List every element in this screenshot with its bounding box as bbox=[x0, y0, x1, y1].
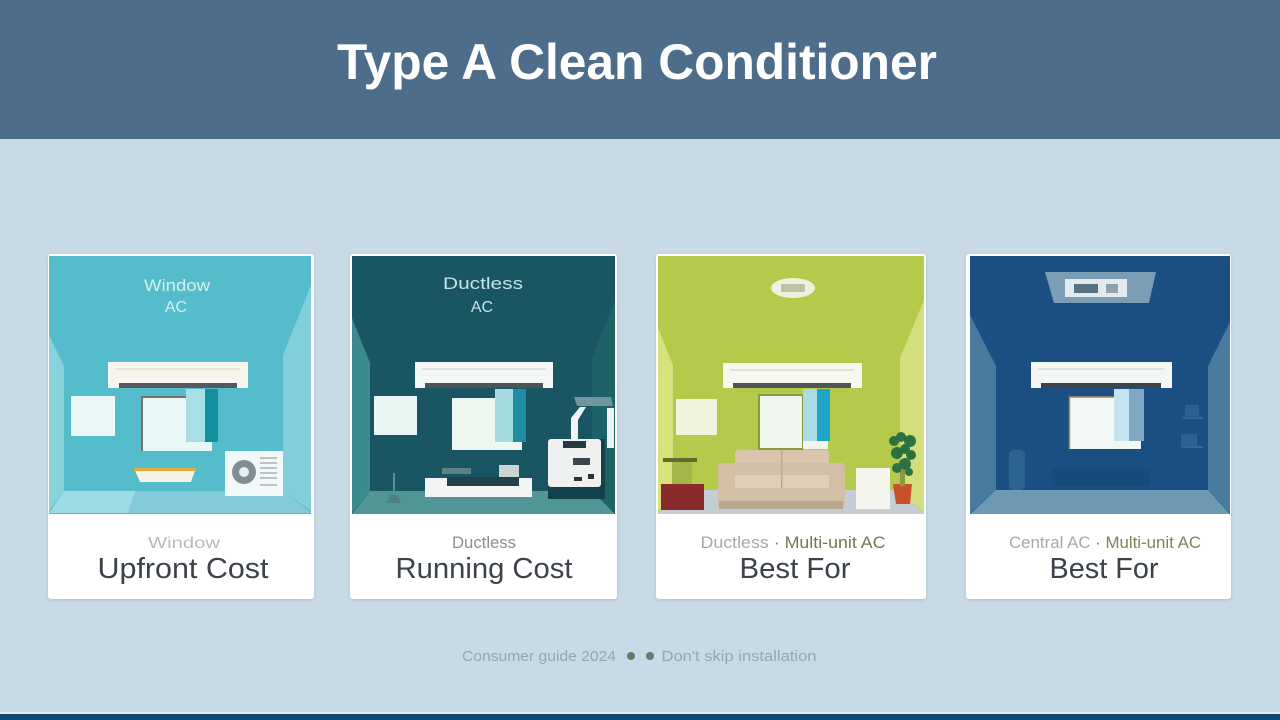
side table bbox=[661, 458, 704, 510]
panel: window AC upfront cost bbox=[48, 254, 314, 599]
room illustration: lime bbox=[658, 256, 924, 514]
room illustration: dark teal bbox=[352, 256, 615, 514]
card text: Upfront Cost bbox=[98, 553, 268, 585]
room label bbox=[443, 274, 523, 316]
card text bbox=[1009, 533, 1201, 585]
wall panel bbox=[676, 399, 717, 435]
window bbox=[141, 389, 218, 451]
AC unit bbox=[1031, 362, 1172, 388]
media console bbox=[386, 465, 532, 503]
card text: Window bbox=[148, 535, 221, 552]
card text: Central AC · Multi-unit AC bbox=[1009, 533, 1201, 552]
panel: central AC best for bbox=[966, 254, 1231, 599]
potted plant bbox=[889, 432, 916, 504]
portable unit bbox=[548, 397, 614, 499]
wall panel bbox=[374, 396, 417, 435]
room illustration: teal bbox=[49, 256, 311, 514]
cabinet bbox=[856, 468, 890, 509]
card text bbox=[700, 533, 886, 585]
ceiling vent bbox=[1045, 272, 1156, 303]
header band bbox=[0, 0, 1280, 139]
bottom bar bbox=[0, 712, 1280, 720]
AC unit bbox=[415, 362, 553, 388]
footer note: Don't skip installation bbox=[662, 648, 816, 665]
card text: Ductless · Multi-unit AC bbox=[700, 533, 886, 552]
room label bbox=[144, 276, 211, 316]
basin bbox=[134, 468, 196, 482]
card text: Best For bbox=[740, 553, 851, 585]
window bbox=[1069, 389, 1144, 449]
outdoor unit bbox=[225, 451, 283, 496]
room label: AC bbox=[471, 299, 493, 316]
AC unit bbox=[723, 363, 862, 388]
room illustration: navy bbox=[970, 256, 1230, 514]
window bbox=[452, 389, 526, 450]
card text bbox=[98, 535, 268, 585]
card text bbox=[396, 533, 572, 585]
card text: Running Cost bbox=[396, 553, 572, 585]
panel: ductless AC running cost bbox=[350, 254, 617, 599]
room label: Window bbox=[144, 276, 211, 295]
footer note: Consumer guide 2024 bbox=[462, 648, 616, 665]
panel: multi-unit AC best for bbox=[656, 254, 926, 599]
wall panel bbox=[71, 396, 115, 436]
room label: Ductless bbox=[443, 274, 523, 293]
sofa bbox=[718, 450, 845, 509]
title: Type A Clean Conditioner bbox=[337, 34, 937, 90]
window bbox=[759, 389, 830, 449]
room label: AC bbox=[165, 299, 187, 316]
AC unit bbox=[108, 362, 248, 388]
card text: Ductless bbox=[452, 533, 516, 552]
ceiling unit bbox=[771, 278, 815, 298]
card text: Best For bbox=[1050, 553, 1159, 585]
footer note bbox=[462, 648, 816, 665]
